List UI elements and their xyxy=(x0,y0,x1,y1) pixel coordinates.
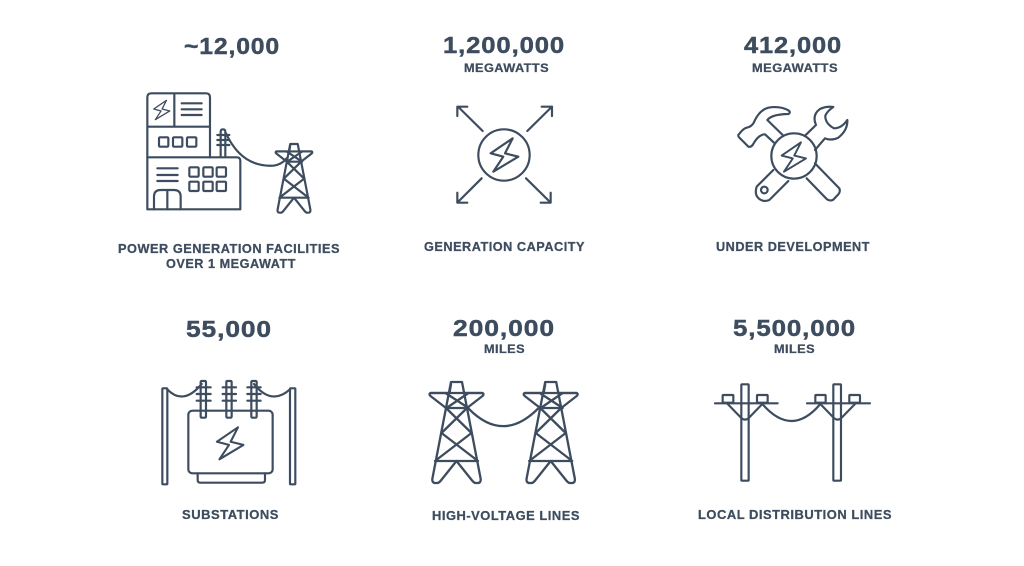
number: 1,200,000: 1,200,000 xyxy=(443,32,565,58)
label: substations: SUBSTATIONS xyxy=(182,508,279,522)
number: 55,000: 55,000 xyxy=(186,316,272,342)
unit: miles: MILES xyxy=(484,342,525,356)
label: high-voltage lines: HIGH-VOLTAGE LINES xyxy=(432,509,580,523)
stat: local distribution lines xyxy=(698,315,892,522)
stat: under development xyxy=(716,32,870,254)
icon: two transmission towers xyxy=(430,382,578,483)
unit: megawatts: MEGAWATTS xyxy=(464,61,549,75)
stat: substations xyxy=(162,316,295,522)
icon: hammer and wrench with bolt xyxy=(738,107,847,201)
unit: miles: MILES xyxy=(774,342,815,356)
unit: megawatts: MEGAWATTS xyxy=(752,61,838,75)
number: 5,500,000: 5,500,000 xyxy=(733,315,856,341)
stat: about 12,000 facilities xyxy=(118,33,340,271)
icon: transformer substation xyxy=(162,381,295,484)
label: under development: UNDER DEVELOPMENT xyxy=(716,240,870,254)
number: ~12,000: ~12,000 xyxy=(184,33,280,59)
number: 412,000: 412,000 xyxy=(744,32,842,58)
icon: two utility poles xyxy=(715,384,870,481)
icon: bolt in circle with four arrows xyxy=(457,107,552,203)
label: power generation facilities xyxy=(118,242,340,271)
label: power generation facilities: POWER GENERATION FACILITIES xyxy=(118,242,340,256)
label: generation capacity: GENERATION CAPACITY xyxy=(424,240,585,254)
label: local distribution lines: LOCAL DISTRIBUTION LINES xyxy=(698,508,892,522)
stat: generation capacity xyxy=(424,32,585,254)
icon: power plant with pylon xyxy=(147,93,312,213)
stat: high-voltage lines xyxy=(430,315,580,523)
number: 200,000: 200,000 xyxy=(453,315,555,341)
label: power generation facilities: OVER 1 MEGAWATT xyxy=(166,257,296,271)
